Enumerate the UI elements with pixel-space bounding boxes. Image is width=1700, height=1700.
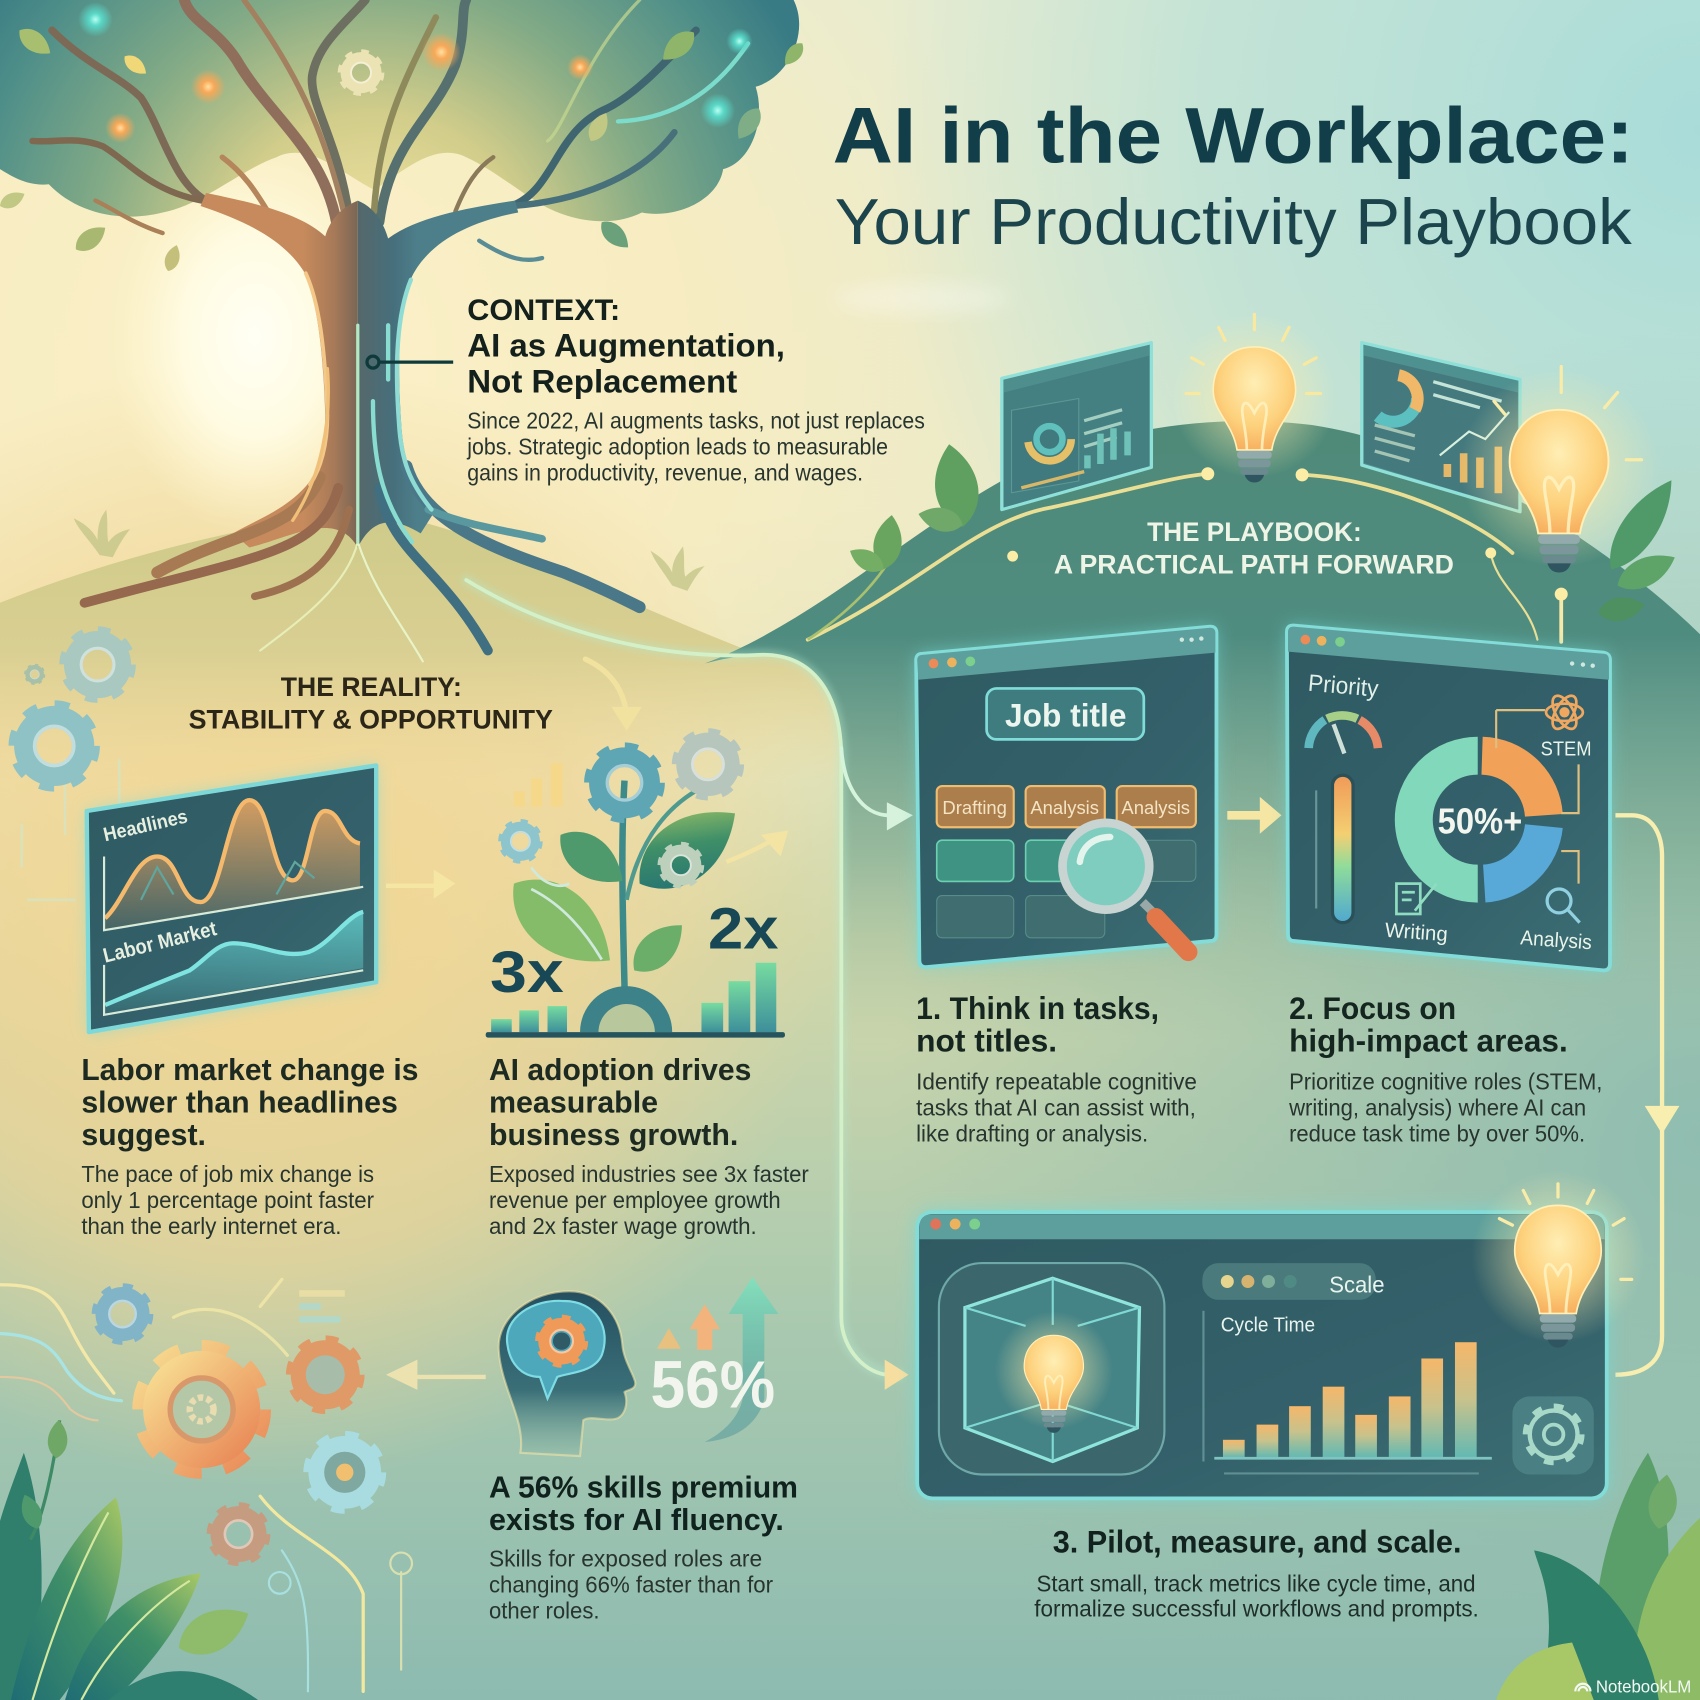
arrow: head to gears — [386, 1360, 486, 1390]
text: step 2: 2. Focus on — [1289, 991, 1456, 1026]
labor market curve — [105, 912, 363, 1014]
text: step 1: tasks that AI can assist with, — [916, 1095, 1196, 1121]
text: labor market: Labor market change is — [81, 1054, 418, 1087]
flowing lines — [0, 1279, 412, 1691]
donut chart — [1414, 710, 1579, 884]
context heading: AI as Augmentation, — [467, 328, 785, 364]
panel: step 2 window: 50%+ — [1438, 802, 1522, 842]
text: skills premium: exists for AI fluency. — [489, 1504, 784, 1537]
text: skills premium: changing 66% faster than for — [489, 1572, 773, 1598]
text: skills premium — [489, 1471, 798, 1624]
context heading: CONTEXT: — [467, 295, 620, 327]
icon: search — [1547, 889, 1580, 923]
text: skills premium: Skills for exposed roles are — [489, 1546, 762, 1572]
task tags: Drafting — [942, 797, 1007, 818]
text: step 2: high-impact areas. — [1289, 1024, 1568, 1059]
text: step 2: writing, analysis) where AI can — [1288, 1095, 1586, 1121]
icon: head with brain and 56 percent stat — [499, 1277, 778, 1456]
pilot box — [939, 1263, 1164, 1474]
icon: atom — [1546, 692, 1583, 733]
foliage bottom right — [1496, 1453, 1700, 1700]
panel: step 2 window: STEM — [1541, 738, 1592, 761]
scale control: Scale — [1329, 1271, 1385, 1297]
job title box: Job title — [1005, 697, 1126, 733]
arrows into step panels — [611, 707, 913, 1390]
tree branches and trunk — [33, 0, 748, 260]
tree — [0, 0, 808, 661]
text: labor market: only 1 percentage point faster — [81, 1187, 374, 1213]
icon: lightbulb top — [1172, 313, 1337, 482]
text: labor market — [81, 1054, 418, 1239]
text: step 2: reduce task time by over 50%. — [1289, 1121, 1585, 1147]
section heading: the playbook — [1054, 516, 1454, 580]
text: business growth: Exposed industries see 3x faster — [489, 1161, 809, 1187]
priority gauge — [1309, 715, 1378, 754]
icon: writing — [1396, 884, 1437, 914]
task tags — [937, 786, 1196, 827]
brain — [507, 1301, 605, 1399]
text: step 1: like drafting or analysis. — [916, 1121, 1148, 1147]
text: step 1: not titles. — [916, 1024, 1057, 1059]
left hill — [0, 510, 841, 781]
tree canopy — [0, 0, 799, 221]
panel: step 3 window: Cycle Time — [1221, 1313, 1315, 1336]
text: step 1: 1. Think in tasks, — [916, 991, 1159, 1026]
notebooklm watermark: NotebookLM — [1596, 1676, 1691, 1696]
section heading: the playbook: A PRACTICAL PATH FORWARD — [1054, 549, 1454, 580]
title: Your Productivity Playbook — [835, 185, 1632, 258]
canopy sparks and leaves — [0, 2, 808, 273]
icon: lightbulb right — [1460, 366, 1658, 572]
section heading: the reality: THE REALITY: — [281, 671, 462, 702]
text: business growth: business growth. — [489, 1119, 738, 1152]
panel: step 3 window — [915, 1210, 1609, 1499]
section heading: the reality — [189, 671, 553, 735]
trunk right half — [358, 201, 518, 548]
flow line: step 2 to step 3 — [1615, 815, 1679, 1375]
stat 56%: 56% — [651, 1347, 775, 1422]
icon: gear button — [1512, 1396, 1594, 1474]
bar chart: cycle time — [1203, 1311, 1492, 1473]
stat 2x: 2x — [708, 897, 779, 962]
job title box — [987, 688, 1144, 739]
section heading: the playbook: THE PLAYBOOK: — [1147, 516, 1362, 547]
icon: left gears and circuits — [15, 632, 195, 900]
chart panel: headlines vs labor market: Labor Market — [101, 917, 219, 968]
text: business growth: measurable — [489, 1086, 658, 1119]
text: step 3: 3. Pilot, measure, and scale. — [1053, 1525, 1461, 1560]
task tags: Analysis — [1121, 797, 1190, 818]
title — [833, 91, 1634, 258]
text: step 3: Start small, track metrics like cycle time, and — [1036, 1571, 1476, 1597]
text: labor market: than the early internet era. — [81, 1213, 342, 1239]
icon: gear cluster — [0, 1279, 412, 1691]
small dashboards and path over hill — [808, 343, 1568, 642]
context body: jobs. Strategic adoption leads to measurable — [466, 433, 888, 459]
text: step 1 — [916, 991, 1197, 1147]
panel: step 2 window — [1287, 626, 1610, 970]
path lines with nodes — [808, 474, 1561, 642]
section heading: the reality: STABILITY & OPPORTUNITY — [189, 704, 553, 735]
growth arrows — [657, 1277, 778, 1442]
text: step 3: formalize successful workflows and prompts. — [1034, 1596, 1479, 1622]
plants on hill — [808, 441, 1687, 640]
tree roots — [85, 273, 640, 661]
text: step 2 — [1288, 991, 1602, 1147]
text: business growth: AI adoption drives — [489, 1054, 751, 1087]
text: labor market: suggest. — [81, 1119, 206, 1152]
main orange gear — [143, 1351, 260, 1468]
task tags: Analysis — [1030, 797, 1099, 818]
text: labor market: slower than headlines — [81, 1086, 398, 1119]
text: skills premium: other roles. — [489, 1598, 600, 1624]
soil gear — [580, 986, 672, 1032]
icon: canopy gear — [341, 53, 381, 93]
context heading: Not Replacement — [467, 363, 737, 399]
stat 3x: 3x — [490, 940, 564, 1005]
text: labor market: The pace of job mix change is — [81, 1161, 374, 1187]
context body — [466, 407, 925, 485]
panel: step 2 window: Analysis — [1520, 926, 1593, 954]
arrow: chart to plant — [386, 870, 455, 899]
text: business growth — [489, 1054, 809, 1239]
context heading — [467, 295, 785, 399]
panel: step 2 window: Priority — [1307, 670, 1380, 703]
text: business growth: revenue per employee growth — [489, 1187, 781, 1213]
grass tufts — [74, 510, 705, 591]
priority slider — [1316, 775, 1353, 923]
trunk left half — [201, 193, 358, 548]
growth bars — [491, 763, 776, 1032]
text: business growth: and 2x faster wage growth. — [489, 1213, 757, 1239]
headlines curve — [105, 800, 360, 930]
text: skills premium: A 56% skills premium — [489, 1471, 798, 1504]
icon: lightbulb step 3 — [1471, 1170, 1644, 1348]
dashboard right — [1362, 343, 1520, 512]
scale control — [1202, 1263, 1385, 1300]
foliage bottom left — [0, 1419, 258, 1700]
context callout marker — [367, 356, 453, 368]
text: step 1: Identify repeatable cognitive — [916, 1069, 1197, 1095]
text: step 2: Prioritize cognitive roles (STEM, — [1289, 1069, 1602, 1095]
sun glow — [108, 136, 401, 537]
head silhouette — [499, 1291, 635, 1456]
icon: plant with gears and growth bars — [486, 733, 788, 1038]
title: AI in the Workplace: — [833, 91, 1634, 180]
context body: gains in productivity, revenue, and wages. — [467, 459, 863, 485]
chart panel: headlines vs labor market — [87, 765, 376, 1032]
flow line from roots to playbook — [466, 580, 900, 1375]
context body: Since 2022, AI augments tasks, not just replaces — [467, 407, 925, 433]
panel: step 2 window: Writing — [1384, 919, 1448, 946]
text: step 3 — [1034, 1525, 1479, 1622]
chart panel: headlines vs labor market: Headlines — [101, 805, 190, 846]
arrow: step 1 to step 2 — [1227, 797, 1282, 834]
dashboard left — [1002, 343, 1151, 510]
panel: step 1 window — [916, 627, 1216, 967]
right hill — [705, 421, 1700, 1062]
icon: magnifying glass — [1062, 823, 1188, 952]
task cells — [937, 840, 1196, 938]
